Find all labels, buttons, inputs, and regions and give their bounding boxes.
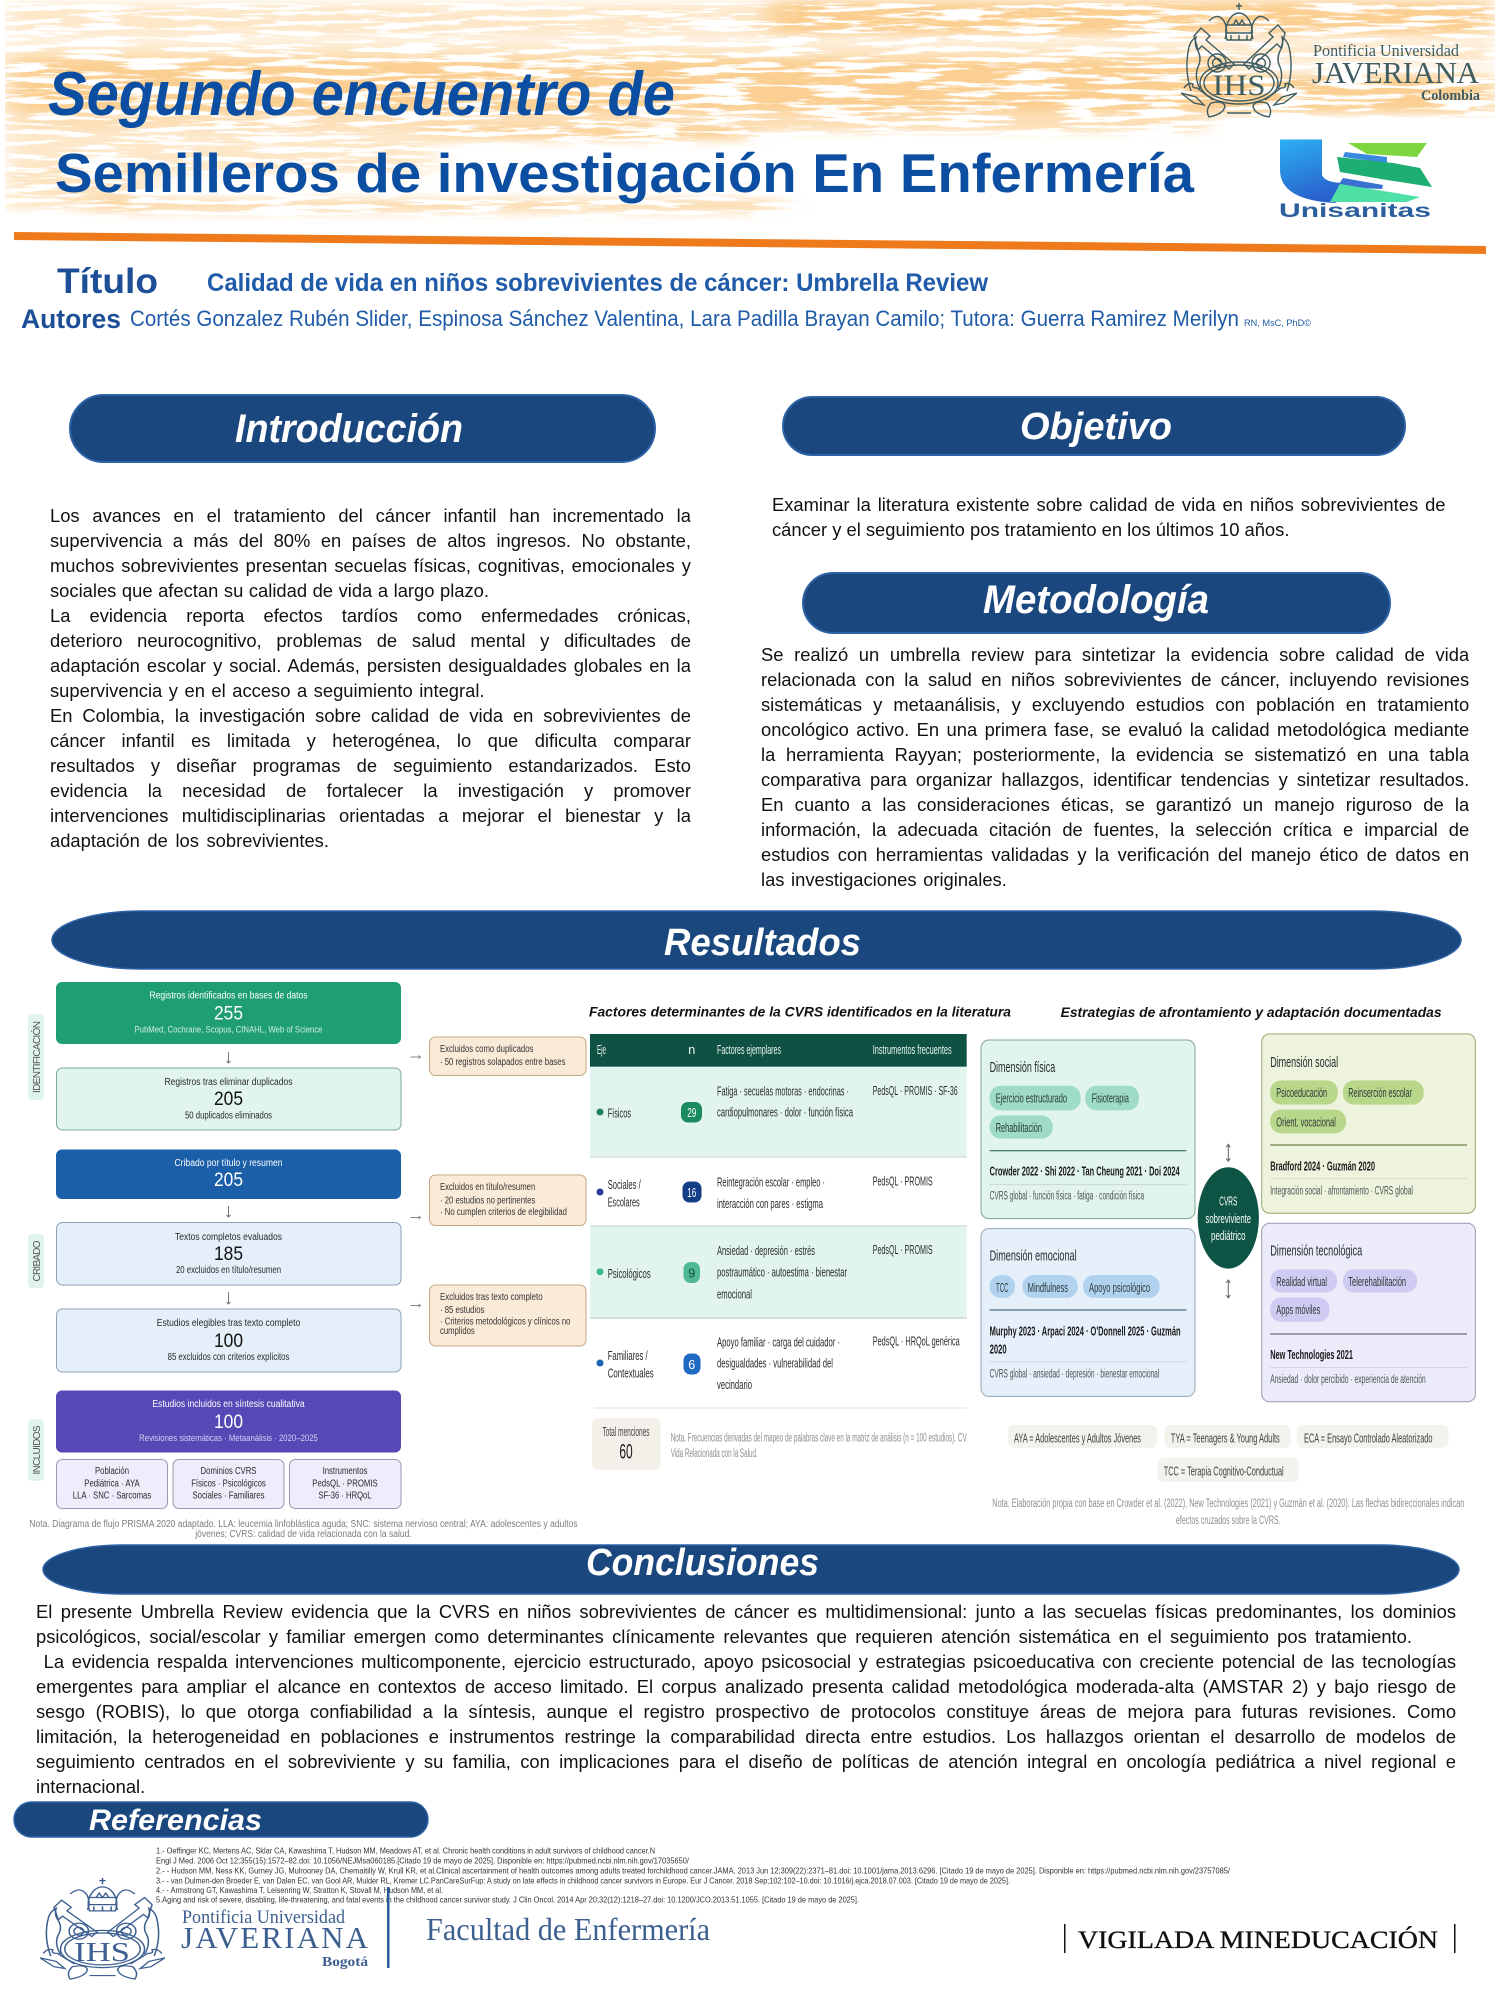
text block: metodología: información, la adecuada citación de fuentes, la selección crítica e imparcial de [760,820,1469,840]
sub-box: dominios CVRS [173,1460,284,1508]
text block: conclusiones: seguimiento centrados en el sobreviviente y su familia, con implicaciones para el diseño de políticas de atención integral en oncología pediátrica a nivel regional e [36,1752,1456,1772]
center node: CVRS sobreviviente pediátrico: pediátrico [1211,1228,1246,1243]
exclusion box: texto completo: cumplidos [440,1326,475,1337]
reference list: 4.- - Armstrong GT, Kawashima T, Leisenring W, Stratton K, Stovall M, Hudson MM, et al. [156,1886,443,1895]
phase label: Identificación [28,1014,44,1100]
text block: introducción: intervenciones multidisciplinarias orientadas a mejorar el bienestar y la [50,806,691,826]
text block: conclusiones: emergentes para ampliar el alcance en contextos de acceso limitado. El corpus analizado presenta calidad metodológica moderada-alta (AMSTAR 2) y bajo riesgo de [36,1676,1456,1696]
table header [590,1034,967,1067]
row: psicológicos [590,1226,967,1318]
legend chip: TYA: TYA = Teenagers & Young Adults [1171,1430,1280,1445]
card: dimensión emocional [981,1229,1195,1396]
row: sociales / escolares: Escolares [608,1195,640,1210]
row: sociales / escolares: interacción con pares · estigma [717,1196,823,1211]
logo: Pontificia Universidad Javeriana Colombia: JAVERIANA [1312,55,1480,90]
poster title: Calidad de vida en niños sobrevivientes de cáncer: Umbrella Review [207,269,989,297]
row: familiares / contextuales: Familiares / [608,1348,648,1363]
exclusion box: título/resumen: · 20 estudios no pertinentes [440,1195,535,1206]
text block: conclusiones [36,1602,1456,1796]
chart heading: Estrategias: Estrategias de afrontamiento y adaptación documentadas [1061,1004,1442,1020]
reference list: Engl J Med. 2006 Oct 12;355(15):1572–82.doi: 10.1056/NEJMsa060185.[Citado 19 de mayo de 2025]. Disponible en: https://pubmed.ncbi.nlm.nih.gov/17035650/ [156,1857,690,1866]
reference list: 1.- Oeffinger KC, Mertens AC, Sklar CA, Kawashima T, Hudson MM, Meadows AT, et al. Chronic health conditions in adult survivors of childhood cancer.N [156,1847,655,1856]
box: registros tras eliminar duplicados: Registros tras eliminar duplicados [164,1077,292,1088]
text block: introducción [50,506,691,851]
card: dimensión emocional: Murphy 2023 · Arpaci 2024 · O'Donnell 2025 · Guzmán [990,1323,1181,1338]
side arrow [410,1056,420,1058]
sub-box: dominios CVRS: Dominios CVRS [201,1466,257,1477]
logo: Pontificia Universidad Javeriana Colombia: IHS [1212,69,1266,102]
exclusion box: título/resumen: · No cumplen criterios de elegibilidad [440,1207,567,1218]
box: registros tras eliminar duplicados [56,1068,401,1130]
card: dimensión tecnológica: Realidad virtual [1276,1274,1327,1289]
heading: Metodología: Metodología [983,578,1209,622]
card: dimensión emocional: CVRS global · ansiedad · depresión · bienestar emocional [990,1368,1159,1380]
card: dimensión social: Orient. vocacional [1276,1114,1336,1129]
exclusion box: texto completo: · Criterios metodológicos y clínicos no [440,1317,571,1328]
row: físicos: Físicos [608,1106,631,1121]
row: sociales / escolares: Sociales / [608,1177,641,1192]
heading: Objetivo [783,397,1405,455]
phase label: Incluidos [28,1419,44,1481]
heading: Referencias: Referencias [89,1804,262,1837]
card: dimensión tecnológica [1262,1223,1475,1402]
card: dimensión social: Bradford 2024 · Guzmán 2020 [1270,1158,1375,1173]
card: dimensión tecnológica: Telerehabilitación [1348,1274,1406,1289]
chart heading: Factores determinantes: Factores determinantes de la CVRS identificados en la literatura [589,1004,1011,1020]
text block: introducción: supervivencia a más del 80% en países de altos ingresos. No obstante, [50,531,691,551]
total mentions card: 60 [619,1440,633,1463]
text block: conclusiones: La evidencia respalda intervenciones multicomponente, ejercicio estructurado, apoyo psicosocial y estrategias psicoeducativa con creciente potencial de las tecnologías [43,1652,1456,1672]
logo: Pontificia Universidad Javeriana Bogotá: IHS [74,1937,130,1967]
reference list [156,1847,1231,1905]
row: familiares / contextuales [590,1318,967,1408]
sub-box: instrumentos: Instrumentos [323,1466,367,1477]
exclusion box: título/resumen: Excluidos en título/resumen [440,1182,535,1193]
row: psicológicos: emocional [717,1287,752,1302]
card: dimensión física: Ejercicio estructurado [996,1090,1067,1106]
sub-box: instrumentos [290,1460,401,1508]
row: familiares / contextuales: vecindario [717,1377,752,1392]
text block: metodología: las investigaciones originales. [760,870,1006,890]
box: registros tras eliminar duplicados: 205 [214,1089,243,1110]
faculty name: Facultad de Enfermería [426,1911,710,1947]
text block: introducción: cáncer infantil es limitada y heterogénea, lo que dificulta comparar [50,731,691,751]
box: textos completos evaluados: 185 [214,1244,243,1265]
title: Segundo encuentro de: Segundo encuentro de [48,60,675,129]
row: físicos: PedsQL · PROMIS · SF-36 [873,1083,958,1098]
card: dimensión emocional: Apoyo psicológico [1089,1280,1150,1295]
author credentials: RN, MsC, PhD© [1244,318,1311,329]
PRISMA note: Nota. Diagrama de flujo PRISMA 2020 adaptado. LLA: leucemia linfoblástica aguda; SNC: sistema nervioso central; AYA: adolescentes y adultos [29,1519,578,1530]
box: cribado por título y resumen [56,1150,401,1199]
text block: metodología: Se realizó un umbrella review para sintetizar la evidencia sobre calidad de vida [760,644,1469,664]
heading: Resultados [52,911,1461,969]
sub-box: dominios CVRS: Sociales · Familiares [192,1490,264,1502]
row: familiares / contextuales: desigualdades · vulnerabilidad del [717,1356,833,1371]
text block: conclusiones: El presente Umbrella Review evidencia que la CVRS en niños sobrevivientes de cáncer es multidimensional: junto a las secuelas físicas predominantes, los dominios [36,1602,1456,1622]
arrow: bidirectional top [1226,1144,1230,1161]
row: sociales / escolares [590,1157,967,1226]
heading: Introducción: Introducción [235,407,463,451]
sub-box: población: LLA · SNC · Sarcomas [73,1490,151,1502]
logo: Pontificia Universidad Javeriana Colombia [1181,3,1481,117]
text block: objetivo [772,494,1445,540]
row: físicos: Fatiga · secuelas motoras · endocrinas · [717,1084,849,1099]
box: registros identificados: Registros identificados en bases de datos [150,991,308,1002]
box: registros identificados [56,982,401,1044]
box: estudios incluidos: Revisiones sistemáticas · Metaanálisis · 2020–2025 [139,1433,318,1444]
heading: Conclusiones: Conclusiones [586,1542,819,1584]
sub-box: instrumentos: SF-36 · HRQoL [318,1490,372,1502]
card: dimensión física: Rehabilitación [996,1120,1042,1135]
card: dimensión social: Dimensión social [1270,1054,1338,1071]
table note [671,1433,967,1460]
heading: Referencias [14,1802,428,1837]
box: registros identificados: PubMed, Cochrane, Scopus, CINAHL, Web of Science [134,1025,322,1036]
card: dimensión emocional: 2020 [990,1342,1007,1357]
heading: Metodología [803,573,1390,633]
center node: CVRS sobreviviente pediátrico: CVRS [1219,1194,1237,1209]
row: psicológicos: PedsQL · PROMIS [873,1242,933,1257]
text block: metodología: En cuanto a las consideraciones éticas, se garantizó un manejo riguroso de la [760,794,1469,814]
arrow [226,1292,230,1304]
card: dimensión física: CVRS global · función física · fatiga · condición física [990,1191,1144,1203]
table header: Instrumentos frecuentes [873,1042,952,1057]
card: dimensión física: Crowder 2022 · Shi 2022 · Tan Cheung 2021 · Doi 2024 [990,1164,1180,1179]
legend chip: TCC [1158,1458,1299,1482]
text block: introducción: sociales que afectan su calidad de vida a largo plazo. [50,581,489,601]
side arrow [410,1304,420,1307]
box: estudios incluidos: 100 [214,1412,243,1433]
title: Semilleros de investigación En Enfermería: Semilleros de investigación En Enfermería [55,142,1194,204]
logo: Pontificia Universidad Javeriana Bogotá [40,1878,369,1979]
text block: objetivo: cáncer y el seguimiento pos tratamiento en los últimos 10 años. [772,520,1289,540]
heading: Introducción [70,395,655,462]
card: dimensión emocional: TCC [996,1280,1008,1295]
phase label: Cribado: CRIBADO [32,1240,43,1282]
exclusion box: duplicados: · 50 registros solapados entre bases [440,1057,566,1068]
card: dimensión social [1262,1034,1475,1213]
text block: metodología: oncológico activo. En una primera fase, se evaluó la calidad metodológica mediante [760,720,1469,740]
row: sociales / escolares: 16 [687,1186,696,1200]
exclusion box: texto completo: · 85 estudios [440,1305,484,1316]
row: psicológicos: Psicológicos [608,1266,651,1281]
box: cribado por título y resumen: Cribado por título y resumen [174,1158,282,1169]
logo: Pontificia Universidad Javeriana Colombia: Pontificia Universidad [1313,41,1459,60]
logo: Unisanitas: Unisanitas [1279,201,1431,222]
center node: CVRS sobreviviente pediátrico [1198,1167,1259,1269]
sub-box: dominios CVRS: Físicos · Psicológicos [191,1479,266,1490]
card: dimensión tecnológica: Dimensión tecnológica [1270,1242,1363,1259]
row: físicos: 29 [687,1106,696,1120]
text block: objetivo: Examinar la literatura existente sobre calidad de vida en niños sobrevivientes de [772,494,1445,514]
heading: Conclusiones [43,1542,1459,1594]
exclusion box: texto completo [430,1285,586,1346]
text block: metodología: la herramienta Rayyan; posteriormente, la evidencia se sistematizó en una tabla [760,744,1469,764]
strategies note [992,1498,1464,1527]
table header: n [688,1042,695,1057]
logo: Pontificia Universidad Javeriana Bogotá: JAVERIANA [181,1920,369,1955]
table header: Factores ejemplares [717,1042,781,1057]
table header: Eje [597,1042,606,1057]
card: dimensión emocional: Dimensión emocional [990,1248,1077,1265]
box: estudios incluidos [56,1390,401,1452]
center node: CVRS sobreviviente pediátrico: sobreviviente [1206,1211,1251,1226]
arrow [226,1206,230,1217]
total mentions card [592,1418,661,1470]
legend chip: TYA [1164,1425,1290,1448]
box: textos completos evaluados: 20 excluidos en título/resumen [176,1265,281,1276]
box: textos completos evaluados: Textos completos evaluados [175,1232,282,1243]
sub-box: población [56,1460,168,1508]
PRISMA flow diagram [28,982,586,1540]
text block: metodología [760,644,1469,890]
row: familiares / contextuales: Apoyo familiar · carga del cuidador · [717,1335,840,1350]
phase label: Cribado [28,1234,44,1288]
row: familiares / contextuales: 6 [688,1358,695,1372]
card: dimensión tecnológica: Apps móviles [1276,1302,1321,1317]
row: psicológicos: Ansiedad · depresión · estrés [717,1243,815,1258]
logo divider line [387,1887,390,1968]
arrow [226,1052,230,1063]
Vigilada Mineducación mark: VIGILADA MINEDUCACIÓN [1078,1926,1438,1954]
reference list: 5.Aging and risk of severe, disabling, life-threatening, and fatal events in the childhood cancer survivor study. J Clin Oncol. 2014 Apr 20;32(12):1218–27.doi: 10.1200/JCO.2013.51.1055. [Citado 19 de mayo de 2025]. [156,1896,859,1905]
row: físicos: cardiopulmonares · dolor · función física [717,1105,853,1120]
table: factores determinantes [590,1034,967,1408]
text block: conclusiones: internacional. [36,1776,145,1796]
table note: Vida Relacionada con la Salud. [671,1448,758,1460]
row: sociales / escolares: Reintegración escolar · empleo · [717,1175,825,1190]
side arrow [410,1216,420,1219]
legend chip: AYA [1008,1425,1157,1448]
sub-box: población: Pediátrica · AYA [84,1479,140,1490]
text block: metodología: sistemáticas y metaanálisis, y excluyendo estudios con población en tratamiento [760,694,1469,714]
box: estudios elegibles [56,1309,401,1372]
text block: metodología: comparativa para organizar hallazgos, identificar tendencias y sintetizar resultados. [760,770,1469,790]
phase label: Incluidos: INCLUIDOS [32,1425,43,1474]
row: sociales / escolares: PedsQL · PROMIS [873,1174,933,1189]
card: dimensión física [981,1040,1195,1219]
text block: introducción: resultados y diseñar programas de seguimiento estandarizados. Esto [50,756,691,776]
logo: Unisanitas [1279,140,1432,222]
text block: introducción: adaptación de los sobrevivientes. [50,831,329,851]
exclusion box: duplicados: Excluidos como duplicados [440,1044,533,1055]
card: dimensión tecnológica: New Technologies 2021 [1270,1347,1353,1362]
row: familiares / contextuales: PedsQL · HRQoL genérica [873,1334,960,1349]
exclusion box: texto completo: Excluidos tras texto completo [440,1292,543,1303]
logo: Pontificia Universidad Javeriana Bogotá: Pontificia Universidad [182,1907,345,1928]
text block: introducción: supervivencia y en el acceso a seguimiento integral. [50,681,485,701]
box: estudios elegibles: 85 excluidos con criterios explícitos [168,1352,289,1363]
card: dimensión social: Psicoeducación [1276,1085,1327,1100]
card: dimensión física: Dimensión física [990,1059,1056,1076]
text block: introducción: La evidencia reporta efectos tardíos como enfermedades crónicas, [50,606,691,626]
text block: introducción: adaptación escolar y social. Además, persisten desigualdades globales en la [50,656,691,676]
row: psicológicos: 9 [688,1266,695,1280]
box: registros tras eliminar duplicados: 50 duplicados eliminados [185,1110,272,1121]
text block: introducción: En Colombia, la investigación sobre calidad de vida en sobrevivientes de [50,706,691,726]
text block: metodología: relacionada con la salud en niños sobrevivientes de cáncer, incluyendo revisiones [760,670,1469,690]
card: dimensión social: Reinserción escolar [1348,1085,1412,1100]
card: dimensión física: Fisioterapia [1092,1090,1129,1106]
text block: metodología: estudios con herramientas validadas y la verificación del manejo ético de datos en [760,844,1469,864]
legend chip: TCC: TCC = Terapia Cognitivo-Conductual [1164,1463,1284,1478]
reference list: 3.- - van Dulmen-den Broeder E, van Dalen EC, van Gool AR, Mulder RL, Kremer LC.PanCareSurFup: A study on late effects in childhood cancer survivors in Europe. Eur J Cancer. 2018 Sep;102:102–10.doi: 10.1016/j.ejca.2018.07.003. [Citado 19 de mayo de 2025]. [156,1876,1010,1885]
arrow: bidirectional bottom [1226,1280,1230,1298]
text block: conclusiones: psicológicos, social/escolar y familiar emergen como determinantes clínicamente relevantes que requieren atención sistemática en el seguimiento pos tratamiento. [36,1626,1411,1646]
row: familiares / contextuales: Contextuales [608,1366,654,1381]
box: registros identificados: 255 [214,1004,243,1024]
box: cribado por título y resumen: 205 [214,1170,243,1191]
text block: introducción: muchos sobrevivientes presentan secuelas físicas, cognitivas, emocionales y [50,556,691,576]
table note: Nota. Frecuencias derivadas del mapeo de palabras clave en la matriz de análisis (n = 100 estudios). CV [671,1433,967,1445]
box: estudios elegibles: Estudios elegibles tras texto completo [157,1318,301,1329]
text block: introducción: evidencia la necesidad de fortalecer la investigación y promover [50,781,691,801]
header banner: orange textured background [0,0,1500,240]
heading: Resultados: Resultados [664,922,861,964]
legend chip: ECA [1297,1425,1448,1448]
legend chip: AYA: AYA = Adolescentes y Adultos Jóvenes [1014,1430,1141,1445]
text block: introducción: Los avances en el tratamiento del cáncer infantil han incrementado la [50,506,691,526]
phase label: Identificación: IDENTIFICACIÓN [30,1021,43,1093]
exclusion box: duplicados [430,1037,586,1076]
reference list: 2.- - Hudson MM, Ness KK, Gurney JG, Mulrooney DA, Chemaitilly W, Krull KR, et al.Clinical ascertainment of health outcomes among adults treated forchildhood cancer.JAMA. 2013 Jun 12;309(22):2371–81.doi: 10.1001/jama.2013.6296. [Citado 19 de mayo de 2025]. Disponible en: https://pubmed.ncbi.nlm.nih.gov/23757085/ [156,1866,1231,1875]
text block: introducción: deterioro neurocognitivo, problemas de salud mental y dificultades de [50,631,691,651]
heading: Objetivo: Objetivo [1020,406,1172,448]
row: psicológicos: postraumático · autoestima · bienestar [717,1265,847,1280]
exclusion box: título/resumen [430,1175,586,1226]
box: textos completos evaluados [56,1222,401,1285]
label: Título: Título [57,262,158,301]
text block: conclusiones: sesgo (ROBIS), lo que otorga confiabilidad a la síntesis, aunque el registro prospectivo de protocolos constituye áreas de mejora para futuras revisiones. Como [36,1702,1456,1722]
logo: Pontificia Universidad Javeriana Colombia: Colombia [1421,88,1481,104]
logo: Pontificia Universidad Javeriana Bogotá: Bogotá [322,1955,368,1970]
sub-box: población: Población [95,1466,129,1477]
text block: conclusiones: limitación, la heterogeneidad en poblaciones e instrumentos restringe la comparabilidad directa entre estudios. Los hallazgos orientan el desarrollo de modelos de [36,1726,1456,1746]
box: estudios incluidos: Estudios incluidos en síntesis cualitativa [152,1399,305,1410]
box: estudios elegibles: 100 [214,1331,243,1352]
PRISMA note [29,1519,578,1540]
orange divider bar [14,232,1486,254]
card: dimensión emocional: Mindfulness [1028,1280,1068,1295]
label: Autores: Autores [21,304,121,334]
strategies note: efectos cruzados sobre la CVRS. [1176,1515,1281,1527]
PRISMA note: jóvenes; CVRS: calidad de vida relacionada con la salud. [194,1529,412,1540]
authors list: Cortés Gonzalez Rubén Slider, Espinosa Sánchez Valentina, Lara Padilla Brayan Camilo; Tutora: Guerra Ramirez Merilyn [130,306,1239,331]
total mentions card: Total menciones [602,1425,650,1439]
row: físicos [590,1067,967,1157]
sub-box: instrumentos: PedsQL · PROMIS [312,1479,378,1490]
